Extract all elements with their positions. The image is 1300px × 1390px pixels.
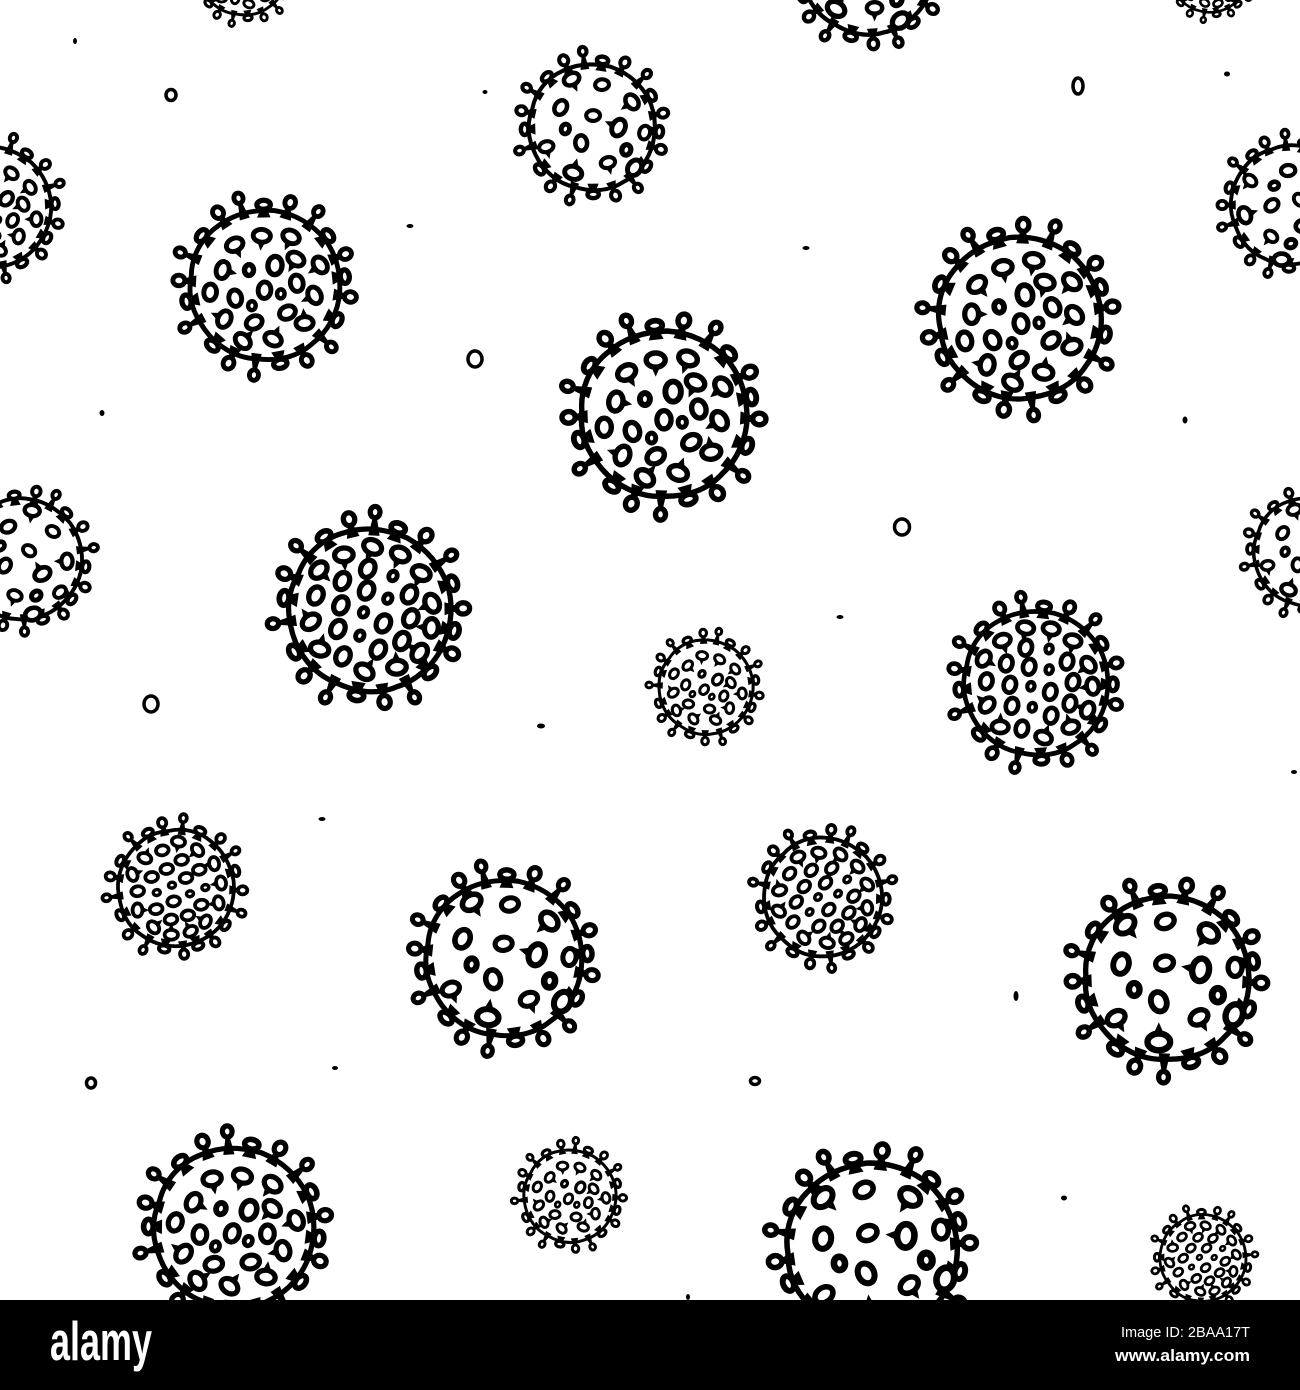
virus: bottom centre small [492, 1119, 646, 1275]
virus: lower centre left [394, 850, 612, 1070]
virus: lower centre right [717, 794, 925, 1002]
image id: Image ID: 2BAA17T [1121, 1324, 1250, 1341]
virus: upper left [163, 186, 365, 389]
virus: small centre [623, 606, 786, 770]
footer bar [0, 1300, 1300, 1390]
virus: lower left dense [90, 804, 258, 971]
website: www.alamy.com [1114, 1346, 1250, 1365]
small round particles [86, 78, 1083, 1088]
virus: right edge middle [1221, 467, 1300, 640]
virus: bottom right small [1127, 1184, 1276, 1333]
virus: left edge middle [0, 455, 126, 665]
virus: top left partial [178, 0, 307, 36]
virus: mid right [929, 578, 1141, 792]
virus: right edge upper [1194, 111, 1300, 299]
virus: top right partial [1141, 0, 1277, 40]
virus: left edge upper [0, 103, 95, 313]
virus: mid left [234, 478, 502, 746]
virus: lower right [1065, 878, 1268, 1083]
virus: centre [560, 313, 766, 520]
virus: upper centre [495, 32, 687, 225]
virus: bottom left [107, 1104, 358, 1356]
virus: top centre partial [753, 0, 980, 83]
virus: bottom right large [756, 1134, 988, 1367]
virus: upper right [903, 203, 1136, 438]
brand logo text: alamy [50, 1310, 152, 1372]
